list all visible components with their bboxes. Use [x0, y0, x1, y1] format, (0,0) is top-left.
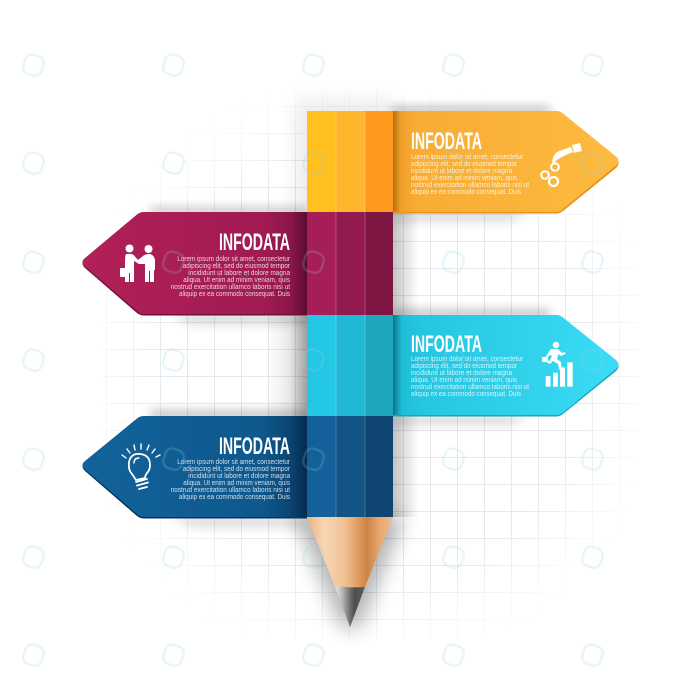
text block: yellow: aliquip ex ea commodo consequat. Duis — [411, 189, 521, 196]
heading: blue: INFODATA — [219, 433, 290, 460]
pencil tip: wood — [307, 517, 393, 587]
text block: crimson: aliqua. Ut enim ad minim veniam, quis — [183, 277, 290, 284]
icon: runner on rising bars — [542, 342, 573, 387]
text block: cyan: aliqua. Ut enim ad minim veniam, quis — [411, 377, 517, 384]
panel: crimson arrow — [82, 212, 307, 316]
text block: crimson: aliquip ex ea commodo consequat. Duis — [179, 291, 290, 298]
text block: cyan: nostrud exercitation ullamco laboris nisi ut — [411, 384, 529, 391]
text block: cyan: aliquip ex ea commodo consequat. Duis — [411, 391, 521, 398]
pencil tip: lead — [335, 586, 365, 627]
pencil segment: cyan — [307, 315, 393, 416]
text block: blue: Lorem ipsum dolor sit amet, consectetur — [177, 459, 291, 466]
text block: cyan — [411, 356, 529, 398]
text block: blue: aliqua. Ut enim ad minim veniam, quis — [183, 480, 290, 487]
text block: yellow: adipiscing elit, sed do eiusmod tempor — [411, 161, 518, 168]
text block: crimson: incididunt ut labore et dolore magna — [188, 270, 290, 277]
text block: cyan: adipiscing elit, sed do eiusmod tempor — [411, 363, 518, 370]
panel: blue arrow — [82, 416, 307, 518]
icon: light bulb — [122, 444, 160, 489]
panel: cyan arrow — [393, 315, 618, 416]
text block: blue: aliquip ex ea commodo consequat. Duis — [179, 494, 290, 501]
heading: cyan: INFODATA — [411, 331, 482, 358]
heading: yellow: INFODATA — [411, 128, 482, 155]
text block: yellow: nostrud exercitation ullamco laboris nisi ut — [411, 182, 529, 189]
panel: yellow arrow — [393, 111, 618, 214]
soft shadows — [150, 100, 550, 628]
pencil segment: blue — [307, 416, 393, 517]
pencil body — [307, 111, 393, 517]
heading: crimson: INFODATA — [219, 229, 290, 256]
text block: yellow: aliqua. Ut enim ad minim veniam, quis — [411, 175, 517, 182]
text block: crimson: Lorem ipsum dolor sit amet, consectetur — [177, 256, 291, 263]
text block: crimson: nostrud exercitation ullamco laboris nisi ut — [171, 284, 290, 291]
text block: blue: adipiscing elit, sed do eiusmod tempor — [183, 466, 291, 473]
icon: handshake — [120, 244, 155, 282]
text block: yellow — [411, 154, 529, 196]
text block: blue — [171, 459, 291, 501]
pencil segment: crimson — [307, 212, 393, 315]
text block: blue: nostrud exercitation ullamco laboris nisi ut — [171, 487, 290, 494]
text block: cyan: incididunt ut labore et dolore magna — [411, 370, 512, 377]
icon: hand with gears — [541, 143, 582, 186]
background grid — [100, 90, 640, 640]
text block: blue: incididunt ut labore et dolore magna — [188, 473, 290, 480]
watermark marks — [21, 53, 605, 668]
text block: crimson: adipiscing elit, sed do eiusmod tempor — [183, 263, 291, 270]
text block: yellow: Lorem ipsum dolor sit amet, consectetur — [411, 154, 524, 161]
text block: crimson — [171, 256, 291, 298]
pencil segment: yellow — [307, 111, 393, 212]
text block: yellow: incididunt ut labore et dolore magna — [411, 168, 512, 175]
text block: cyan: Lorem ipsum dolor sit amet, consectetur — [411, 356, 524, 363]
